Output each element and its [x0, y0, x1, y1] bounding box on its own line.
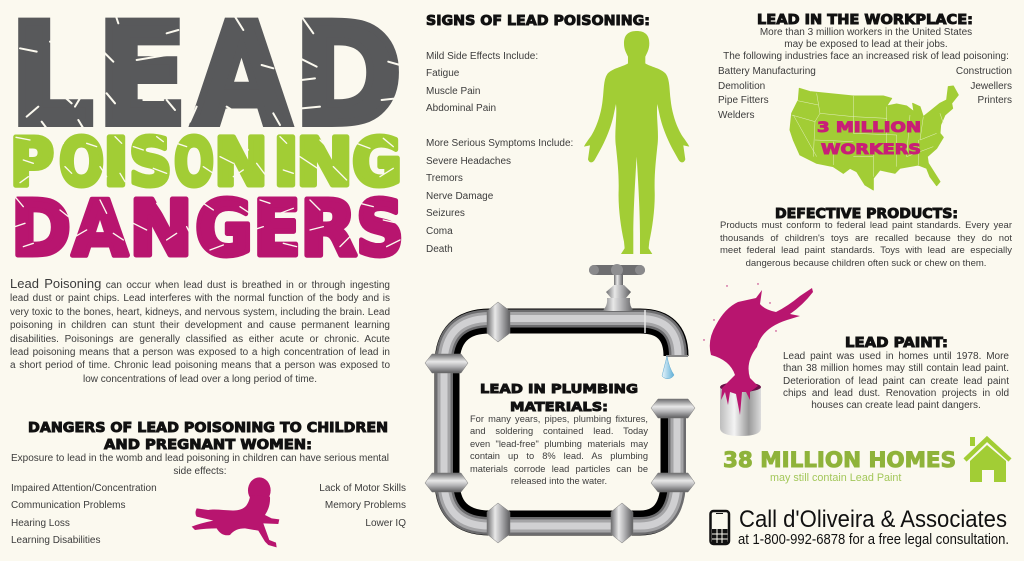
title word: POISONING: N	[296, 124, 353, 201]
text: plumbing: even "lead-free" plumbing materials may	[470, 439, 648, 449]
title word: DANGERS: E	[253, 185, 301, 274]
map: United States with state lines and 3 million workers label: WORKERS	[821, 142, 921, 158]
icon: crawling baby silhouette	[192, 477, 279, 547]
title word: POISONING: I	[273, 124, 299, 201]
heading: signs of lead poisoning: SIGNS OF LEAD POISONING:	[426, 13, 650, 29]
collars	[425, 354, 695, 492]
list: dangers right: Lack of Motor Skills	[319, 482, 406, 494]
title word: DANGERS: D	[11, 185, 71, 274]
list: dangers right: Memory Problems	[325, 500, 406, 511]
text: plumbing: materials corrode lead particles can be	[470, 464, 648, 474]
title word: POISONING: S	[129, 124, 172, 201]
text: plumbing: and soldering contained lead. Today	[470, 426, 648, 436]
heading: lead in the workplace: LEAD IN THE WORKPLACE:	[757, 13, 973, 28]
list: industries right: Jewellers	[970, 81, 1012, 92]
list: signs and symptoms: Muscle Pain	[426, 86, 480, 97]
heading: lead paint: LEAD PAINT:	[845, 336, 948, 351]
text: workplace intro: More than 3 million workers in the United States	[760, 27, 972, 38]
icon: green human silhouette	[584, 31, 689, 254]
call to action: phone consultation: Call d'Oliveira & Associates	[739, 506, 1007, 533]
heading: dangers to children and pregnant women: DANGERS OF LEAD POISONING TO CHILDREN	[28, 421, 388, 436]
label: may still contain lead paint: may still contain Lead Paint	[770, 472, 901, 484]
title word: DANGERS: S	[356, 185, 404, 274]
title word: POISONING: N	[214, 124, 268, 201]
list: dangers left	[11, 482, 157, 546]
heading: lead in plumbing materials: LEAD IN PLUMBING	[480, 381, 638, 396]
text: dangers intro	[11, 452, 389, 476]
list: industries right: Printers	[978, 95, 1012, 106]
text: lead poisoning intro paragraph: Lead Poisoning can occur when lead dust is breathed in or through ingesting	[10, 276, 390, 291]
list: signs and symptoms	[426, 50, 573, 255]
text: lead paint: houses can create lead paint dangers.	[811, 400, 981, 411]
text: lead paint: than 38 million homes may still contain lead paint.	[783, 363, 1009, 374]
heading: defective products: DEFECTIVE PRODUCTS:	[775, 207, 958, 222]
list: industries left	[718, 66, 816, 121]
list: dangers right	[319, 482, 406, 528]
list: industries left: Demolition	[718, 81, 765, 92]
text: lead paint: chips and lead dust. Renovation projects in old	[783, 388, 1009, 399]
title word: POISONING	[10, 124, 402, 201]
list: signs and symptoms: More Serious Symptoms Include:	[426, 138, 573, 149]
list: industries left: Battery Manufacturing	[718, 66, 816, 77]
list: industries right	[956, 66, 1012, 106]
title word: DANGERS: R	[300, 185, 357, 274]
title word: LEAD	[10, 0, 402, 156]
icon: water drop	[662, 356, 674, 379]
title word: DANGERS: A	[72, 185, 128, 274]
text: workplace intro	[723, 27, 1009, 62]
text: workplace intro: The following industries face an increased risk of lead poisoning:	[723, 51, 1009, 62]
text: dangers intro: side effects:	[173, 466, 227, 476]
label: 38 million homes: 38 MILLION HOMES	[723, 448, 956, 472]
text: defective products: meet federal lead paint standards. Toys with lead are especially	[720, 245, 1012, 256]
title word: POISONING: I	[103, 124, 129, 201]
list: signs and symptoms: Fatigue	[426, 68, 459, 79]
list: signs and symptoms: Nerve Damage	[426, 191, 493, 202]
title: LEAD POISONING DANGERS	[10, 0, 404, 274]
icon: green house	[965, 437, 1010, 482]
title word: POISONING: G	[352, 124, 402, 201]
title word: DANGERS	[11, 185, 404, 274]
text: lead paint	[783, 351, 1009, 411]
list: dangers left: Hearing Loss	[11, 518, 70, 528]
heading: lead in plumbing materials: MATERIALS:	[510, 399, 608, 414]
map: United States with state lines and 3 million workers label	[790, 86, 958, 190]
icon: mobile phone	[710, 511, 729, 544]
text: lead poisoning intro paragraph: disabilities. Poisonings are generally classified as either acute or chronic. Acute	[10, 334, 390, 345]
list: dangers right: Lower IQ	[365, 518, 406, 528]
text: lead poisoning intro paragraph: low concentrations of lead over a long period of time.	[83, 374, 317, 385]
list: dangers left: Communication Problems	[11, 500, 126, 511]
list: signs and symptoms: Seizures	[426, 208, 465, 219]
text: workplace intro: may be exposed to lead at their jobs.	[784, 39, 948, 50]
list: signs and symptoms: Death	[426, 244, 453, 255]
icon: faucet pipe frame	[425, 264, 695, 543]
title word: POISONING: O	[59, 124, 104, 201]
heading: dangers to children and pregnant women: AND PREGNANT WOMEN:	[104, 438, 312, 453]
text: lead paint: Lead paint was used in homes until 1978. More	[783, 351, 1009, 362]
faucet handle and body	[589, 265, 645, 275]
text: defective products: dangerous because children often suck or chew on them.	[746, 258, 986, 268]
text: plumbing: released into the water.	[511, 476, 607, 486]
title word: DANGERS: G	[195, 185, 253, 274]
title word: DANGERS: N	[129, 185, 193, 274]
list: industries right: Construction	[956, 66, 1012, 77]
list: signs and symptoms: Severe Headaches	[426, 156, 511, 167]
text: plumbing: contain up to 8% lead. As plumbing	[470, 451, 648, 461]
text: lead poisoning intro paragraph: a short period of time. Chronic lead poisoning means that a person was exposed to	[10, 360, 390, 371]
list: signs and symptoms: Tremors	[426, 173, 463, 184]
text: defective products: thousands of children's toys are recalled because they do not	[720, 232, 1012, 244]
list: signs and symptoms: Mild Side Effects Include:	[426, 50, 538, 62]
list: dangers left: Learning Disabilities	[11, 535, 100, 546]
text: lead poisoning intro paragraph: very toxic to the bones, heart, kidneys, and nervous system, including the brain. Lead	[10, 307, 390, 318]
text: defective products	[720, 220, 1012, 268]
text: dangers intro: Exposure to lead in the womb and lead poisoning in children can have serious mental	[11, 452, 389, 464]
list: industries left: Pipe Fitters	[718, 95, 769, 106]
call to action: phone consultation	[738, 506, 1009, 548]
text: lead poisoning intro paragraph	[10, 276, 390, 385]
text: lead poisoning intro paragraph: lead poisoning means that a person was exposed to a high concentration of lead in	[10, 347, 390, 358]
icon: paint can with magenta splash	[703, 283, 813, 436]
map: United States with state lines and 3 million workers label: 3 MILLION	[817, 120, 921, 136]
text: plumbing: For many years, pipes, plumbing fixtures,	[470, 414, 648, 424]
list: industries left: Welders	[718, 110, 754, 121]
text: lead poisoning intro paragraph: poisoning in children can stunt their development and cause permanent learning	[10, 320, 390, 331]
text: lead paint: Deterioration of lead paint can create lead paint	[783, 376, 1009, 387]
list: signs and symptoms: Coma	[426, 226, 453, 237]
text: lead poisoning intro paragraph: lead dust or paint chips. Lead interferes with the normal function of the body and is	[10, 293, 390, 304]
text: plumbing	[470, 414, 648, 486]
title word: POISONING: P	[10, 124, 54, 201]
title word: POISONING: O	[174, 124, 214, 201]
list: signs and symptoms: Abdominal Pain	[426, 103, 496, 114]
heading: lead in plumbing materials	[480, 381, 638, 414]
text: defective products: Products must conform to federal lead paint standards. Every year	[720, 220, 1012, 231]
heading: dangers to children and pregnant women	[28, 421, 388, 453]
list: dangers left: Impaired Attention/Concentration	[11, 482, 157, 494]
